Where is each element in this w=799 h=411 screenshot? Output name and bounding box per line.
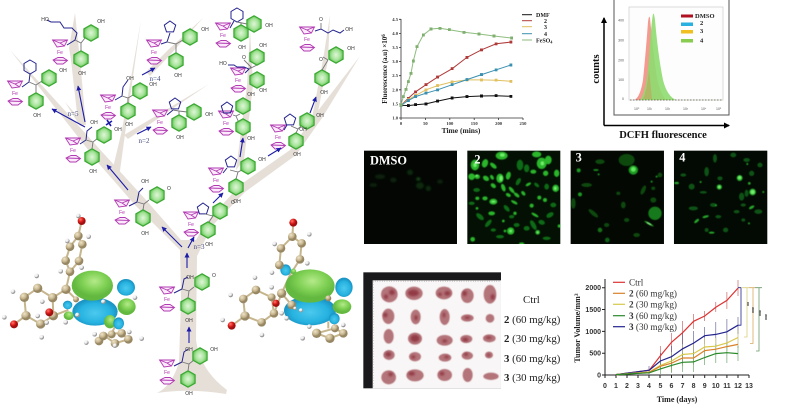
microscopy panel 3: [571, 151, 664, 244]
molecule: n=3 branch: OH: [233, 199, 241, 205]
fluorescence microscopy panels: [364, 151, 767, 245]
molecule: top right benzophenone: OH: [347, 46, 355, 52]
molecule: base compound: [160, 347, 218, 397]
molecule: left middle: OH: [114, 127, 122, 133]
line chart: tumor volume: 3 (60 mg/kg): [629, 311, 677, 321]
line chart: fluorescence over time: FeSO: [536, 38, 550, 44]
line chart: fluorescence over time: Fluorescence (a.u) ×10: [381, 37, 389, 104]
line chart: tumor volume: 2000: [585, 285, 601, 292]
molecule: top right benzophenone: O: [319, 57, 323, 63]
molecule: centre right ketone: OH: [259, 88, 267, 94]
molecule: centre right ketone: Fe: [235, 78, 241, 84]
line chart: fluorescence over time: 200: [495, 121, 503, 126]
flow cytometry panel: 2: [700, 20, 703, 27]
tumor group labels: Ctrl: [523, 294, 540, 306]
flow cytometry panel: DMSO: [695, 13, 714, 20]
molecule: centre: OH: [126, 76, 134, 82]
flow cytometry panel: 10⁰: [634, 107, 640, 111]
microscopy panel 3: 3: [576, 151, 582, 165]
molecule: n=3 branch: [208, 156, 266, 205]
line chart: tumor volume: Time (days): [657, 395, 698, 404]
n labels: n=2: [139, 137, 150, 145]
molecule: right branch furan: OH: [299, 127, 307, 133]
molecule: n=2 furan: [152, 98, 213, 141]
molecule: base compound: OH: [185, 347, 193, 353]
line chart: tumor volume: 10: [712, 383, 720, 390]
line chart: fluorescence over time: 4: [544, 32, 547, 38]
molecule: left middle: OH: [90, 120, 98, 126]
line chart: fluorescence over time: 50: [423, 121, 428, 126]
microscopy panel 2: [467, 151, 561, 245]
molecule: centre: OH: [125, 122, 133, 128]
line chart: fluorescence over time: 4.5: [392, 17, 399, 22]
molecule: n=3 base: Fe: [188, 222, 194, 228]
n labels: [68, 75, 205, 251]
flow cytometry panel: DCFH fluorescence: [619, 130, 707, 141]
molecule: top centre pyran: OH: [238, 45, 246, 51]
molecule: top centre pyran: OH: [265, 23, 273, 29]
line chart: fluorescence over time: 6: [382, 34, 387, 37]
line chart: fluorescence over time: 250: [520, 121, 527, 126]
line chart: tumor volume: 0: [603, 383, 607, 390]
molecule: n=4 furan: [146, 21, 209, 79]
line chart: tumor volume: 5: [658, 383, 662, 390]
molecule: n=3 branch: OH: [258, 157, 266, 163]
molecule: left lower: Fe: [119, 210, 125, 216]
line chart: fluorescence over time: 3.5: [392, 45, 399, 50]
flow cytometry panel: 10⁴: [701, 107, 707, 111]
line chart: tumor volume: 6: [670, 383, 674, 390]
line chart: fluorescence over time: 3: [544, 25, 547, 31]
molecule: n=5 pyran: OH: [59, 68, 67, 74]
line chart: tumor volume: 2: [625, 383, 629, 390]
line chart: tumor volume: 3 (30 mg/kg): [629, 322, 677, 332]
n labels: n=3: [194, 243, 205, 251]
molecule: left lower: OH: [141, 231, 149, 237]
molecule: n=2 furan: OH: [205, 112, 213, 118]
flow cytometry panel: 10¹: [647, 107, 653, 111]
molecule: n=4 furan: OH: [201, 27, 209, 33]
molecule: top left open chain: OH: [97, 19, 105, 25]
line chart: tumor volume: 9: [703, 383, 707, 390]
tumor photograph: [363, 272, 501, 388]
molecule: centre right ketone: [219, 43, 267, 94]
microscopy panel 4: 4: [679, 151, 685, 165]
molecule: top centre pyran: [216, 8, 273, 51]
molecule: left middle: Fe: [70, 148, 76, 154]
molecule: n=3 base: OH: [205, 242, 213, 248]
line chart: tumor volume: **: [743, 302, 749, 306]
tumor group labels: 3 (30 mg/kg): [504, 372, 561, 384]
line chart: tumor volume: 2 (60 mg/kg): [629, 288, 677, 298]
molecule: centre right furan: OH: [247, 92, 255, 98]
molecule: base compound: Fe: [164, 370, 170, 376]
molecule: second stage: OH: [185, 318, 193, 324]
line chart: fluorescence over time: 150: [471, 121, 478, 126]
line chart: tumor volume: 11: [723, 383, 731, 390]
molecule: n=5 pyran: [8, 60, 67, 119]
line chart: tumor volume: ***: [755, 310, 761, 316]
line chart: tumor volume: 12: [734, 383, 742, 390]
line chart: tumor volume: 1500: [585, 307, 601, 314]
line chart: fluorescence over time: 4.0: [392, 31, 399, 36]
molecule: second stage: O: [212, 273, 216, 279]
molecule: top right benzophenone: O: [319, 17, 323, 23]
line chart: tumor volume: 2 (30 mg/kg): [629, 300, 677, 310]
molecule: left middle: OH: [89, 169, 97, 175]
molecule: right branch furan: Fe: [275, 135, 281, 141]
line chart: fluorescence over time: 2: [544, 19, 547, 25]
flow cytometry panel: 200: [618, 58, 624, 62]
line chart: tumor volume: [573, 278, 767, 404]
line chart: tumor volume: 500: [589, 350, 601, 358]
tumor group labels: [504, 294, 561, 384]
line chart: tumor volume: 3: [636, 383, 640, 390]
molecule: centre right furan: [218, 92, 255, 142]
molecule: n=3 base: O: [231, 200, 235, 206]
molecule: centre right furan: OH: [247, 136, 255, 142]
tumor group labels: 2 (30 mg/kg): [504, 333, 561, 345]
molecule: right branch furan: OH: [316, 113, 324, 119]
molecule: left lower: O: [167, 186, 171, 192]
line chart: fluorescence over time: 0: [400, 121, 403, 126]
molecule: top left open chain: OH: [78, 71, 86, 77]
microscopy panel 4: [674, 151, 767, 244]
microscopy panel DMSO: DMSO: [370, 153, 407, 167]
tumor group labels: 2 (60 mg/kg): [504, 314, 561, 326]
molecule: n=3 base: [184, 200, 235, 248]
molecule: centre right ketone: OH: [259, 43, 267, 49]
molecule: n=5 pyran: Fe: [12, 91, 18, 97]
molecule: n=4 furan: OH: [174, 73, 182, 79]
molecule: top left open chain: [41, 17, 105, 77]
line chart: fluorescence over time: [381, 13, 552, 135]
tumor group labels: 3 (60 mg/kg): [504, 353, 561, 365]
molecule: top right benzophenone: Fe: [304, 37, 310, 43]
line chart: tumor volume: ***: [761, 314, 767, 320]
line chart: tumor volume: 4: [647, 383, 651, 390]
line chart: fluorescence over time: DMF: [536, 13, 550, 19]
molecule: top right benzophenone: OH: [345, 27, 353, 33]
flow cytometry panel: 10³: [683, 107, 689, 111]
line chart: fluorescence over time: 2.5: [392, 73, 399, 78]
flow cytometry panel: 10⁵: [716, 107, 722, 111]
line chart: tumor volume: 8: [692, 383, 696, 390]
line chart: tumor volume: 0: [597, 372, 601, 380]
line chart: tumor volume: 3: [574, 293, 580, 296]
flow cytometry panel: [591, 0, 729, 141]
molecule: n=5 pyran: OH: [33, 113, 41, 119]
molecule: centre: OH: [149, 82, 157, 88]
orbital model right: [220, 219, 353, 343]
line chart: tumor volume: ***: [748, 307, 754, 313]
flow cytometry panel: 10²: [665, 107, 671, 111]
molecule: top centre pyran: Fe: [220, 33, 226, 39]
molecule: n=4 furan: Fe: [151, 50, 157, 56]
reaction arrows: [52, 68, 316, 343]
flow cytometry panel: 4: [700, 38, 704, 44]
tree background: [10, 13, 360, 394]
molecule: centre: Fe: [105, 105, 111, 111]
molecule: top right benzophenone: [300, 17, 355, 96]
line chart: tumor volume: 1000: [585, 329, 601, 336]
molecule: right branch furan: OH: [293, 152, 301, 158]
line chart: fluorescence over time: 1.0: [392, 116, 399, 120]
molecule: left middle: [66, 120, 122, 175]
line chart: tumor volume: 1: [614, 383, 618, 390]
flow cytometry panel: 3: [700, 28, 704, 35]
n labels: n=5: [68, 110, 79, 118]
molecule: second stage: [160, 273, 216, 324]
line chart: fluorescence over time: 100: [446, 121, 454, 126]
n labels: n=4: [150, 75, 161, 83]
molecule: n=2 furan: OH: [176, 135, 184, 141]
line chart: tumor volume: 7: [681, 383, 685, 390]
molecule: base compound: OH: [210, 347, 218, 353]
line chart: tumor volume: Ctrl: [629, 278, 644, 288]
molecule: left lower: OH: [141, 179, 149, 185]
molecule: second stage: OH: [186, 275, 194, 281]
microscopy panel DMSO: [364, 151, 457, 244]
line chart: fluorescence over time: 1.5: [392, 102, 399, 106]
microscopy panel 2: 2: [474, 152, 480, 166]
molecule: n=3 branch: Fe: [213, 178, 219, 184]
molecule: top right benzophenone: OH: [320, 90, 328, 96]
flow cytometry panel: 300: [618, 38, 624, 42]
molecule: top left open chain: Fe: [57, 50, 63, 56]
molecule: n=2 furan: Fe: [157, 120, 163, 126]
line chart: fluorescence over time: 3.0: [392, 59, 399, 64]
flow cytometry panel: 400: [618, 18, 624, 22]
line chart: tumor volume: Tumor Volume/mm: [573, 296, 582, 363]
molecule: centre right ketone: O: [242, 55, 246, 61]
line chart: fluorescence over time: 4: [550, 40, 552, 44]
molecule: right branch furan: [270, 113, 324, 158]
molecule: base compound: OH: [185, 391, 193, 397]
molecule: centre: [100, 76, 157, 128]
flow cytometry panel: counts: [591, 54, 602, 84]
orbital model left: [2, 214, 144, 348]
line chart: tumor volume: 13: [745, 383, 753, 390]
flow cytometry panel: 100: [618, 78, 624, 82]
flow cytometry panel: 0: [622, 97, 624, 101]
line chart: fluorescence over time: 2.0: [392, 88, 399, 92]
molecule: centre right furan: Fe: [223, 121, 229, 127]
molecule: centre right ketone: HO: [219, 61, 227, 67]
molecule: top left open chain: HO: [41, 17, 49, 23]
molecule: second stage: Fe: [164, 297, 170, 303]
line chart: fluorescence over time: Time (mins): [442, 126, 481, 135]
molecule: left lower: [114, 179, 171, 237]
